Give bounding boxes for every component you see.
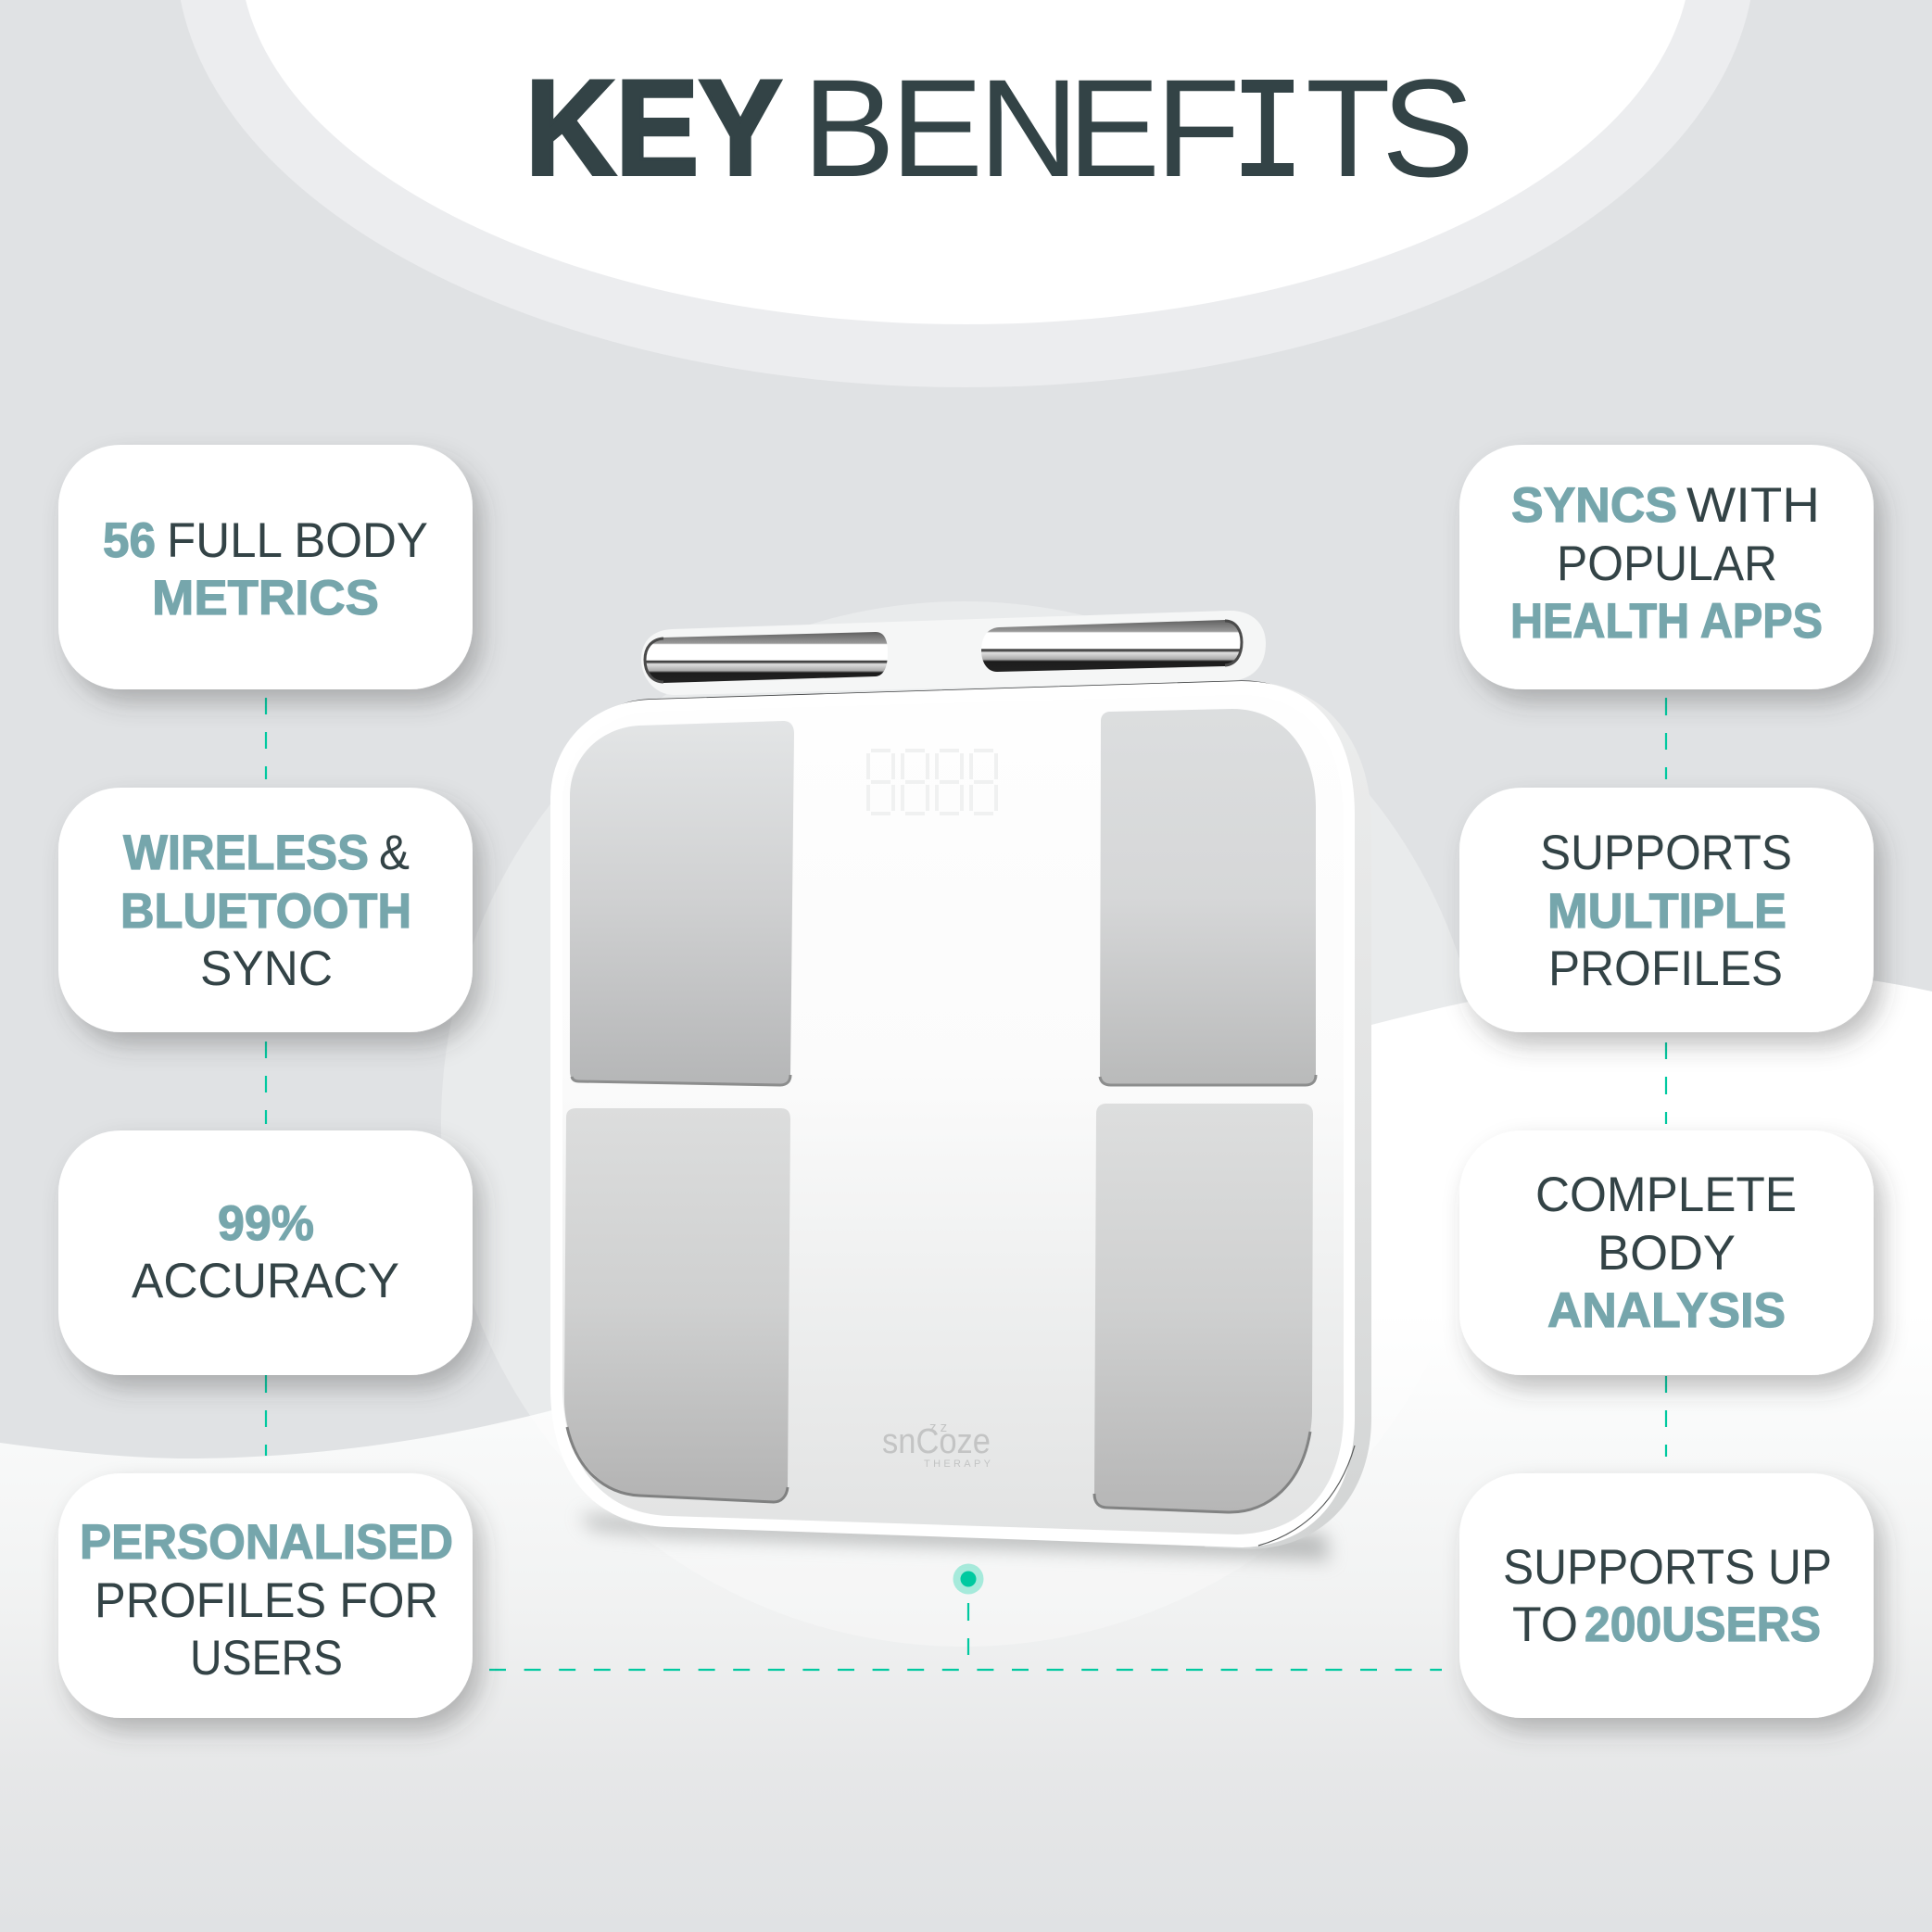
card text: ACCURACY <box>132 1254 399 1308</box>
card text: BLUETOOTH <box>120 884 411 939</box>
card text <box>103 513 428 625</box>
card text: SYNCS <box>1511 478 1677 533</box>
card text: SYNC <box>200 941 333 996</box>
connector: right column dashes <box>1665 698 1667 1457</box>
card text <box>1510 478 1823 649</box>
card text <box>1535 1168 1797 1338</box>
card text: METRICS <box>152 571 379 625</box>
title letter I slab serifs <box>1242 80 1294 176</box>
card: 99% accuracy <box>58 1130 473 1375</box>
card text: & <box>379 826 410 880</box>
card: personalised profiles for users <box>58 1473 473 1718</box>
circle behind scale <box>441 601 1486 1647</box>
title <box>525 50 1474 206</box>
right electrode end cap <box>1225 621 1242 665</box>
card: complete body analysis <box>1459 1130 1874 1375</box>
top-left pad lower edge <box>572 1075 790 1085</box>
card text: ANALYSIS <box>1547 1283 1786 1338</box>
scale top edge line <box>593 681 1302 721</box>
right metal electrode <box>981 620 1243 672</box>
card text: TO <box>1512 1597 1578 1652</box>
bottom-left foot pad <box>564 1108 790 1502</box>
brand logo: z z <box>929 1420 947 1435</box>
card text <box>132 1196 399 1308</box>
product: body composition scale <box>550 611 1371 1560</box>
bottom-right foot pad <box>1094 1104 1313 1512</box>
card text <box>80 1515 453 1686</box>
top white arc <box>240 0 1691 324</box>
scale front face <box>562 695 1344 1534</box>
card text <box>120 826 411 996</box>
card: supports multiple profiles <box>1459 788 1874 1032</box>
connector: left column dashes <box>265 698 267 1456</box>
top-left foot pad <box>570 721 794 1086</box>
marker dot <box>953 1564 984 1594</box>
card text: SUPPORTS <box>1540 826 1792 880</box>
bottom-right pad lower edge <box>1094 1432 1310 1512</box>
card text: MULTIPLE <box>1547 884 1787 939</box>
left metal electrode <box>644 632 888 683</box>
top-right pad lower edge <box>1100 1075 1316 1085</box>
card text: HEALTH APPS <box>1510 594 1823 649</box>
scale handle <box>641 611 1266 695</box>
card: syncs with popular health apps <box>1459 445 1874 689</box>
card text: SUPPORTS UP <box>1503 1540 1832 1595</box>
card text: PROFILES FOR <box>95 1573 438 1628</box>
card text: PERSONALISED <box>80 1515 453 1570</box>
card text: WITH <box>1686 478 1820 533</box>
card text: COMPLETE <box>1535 1168 1797 1222</box>
scale front rim <box>550 681 1355 1547</box>
left electrode end cap <box>645 638 663 682</box>
connector: horizontal dashes <box>489 1669 1442 1671</box>
bottom wave <box>0 967 1932 1932</box>
scale side edge <box>1205 681 1371 1549</box>
card text: 56 <box>103 513 156 568</box>
scale corner dark line <box>1258 1446 1355 1546</box>
card text: 200USERS <box>1585 1597 1821 1652</box>
title word: BENEFITS: BENEFITS <box>802 50 1474 206</box>
card: supports up to 200 users <box>1459 1473 1874 1718</box>
brand logo: THERAPY <box>924 1458 991 1470</box>
card text: POPULAR <box>1557 537 1777 591</box>
card text: WIRELESS <box>123 826 369 880</box>
bottom-left pad lower edge <box>567 1427 788 1502</box>
brand logo: snCoze <box>882 1422 991 1461</box>
card text: 99% <box>218 1196 314 1251</box>
card text <box>1540 826 1792 996</box>
card text <box>1503 1540 1832 1652</box>
card text: BODY <box>1597 1226 1736 1281</box>
card: wireless and bluetooth sync <box>58 788 473 1032</box>
scale floor shadow <box>579 1515 1330 1560</box>
card: 56 full body metrics <box>58 445 473 689</box>
digital display 8888 <box>868 751 996 814</box>
title word: KEY: KEY <box>525 52 782 203</box>
top outer arc <box>176 0 1755 387</box>
card text: PROFILES <box>1548 941 1783 996</box>
connector: vertical dashes to product <box>967 1603 969 1655</box>
card text: FULL BODY <box>167 513 428 568</box>
top-right foot pad <box>1100 709 1316 1085</box>
card text: USERS <box>190 1631 343 1686</box>
